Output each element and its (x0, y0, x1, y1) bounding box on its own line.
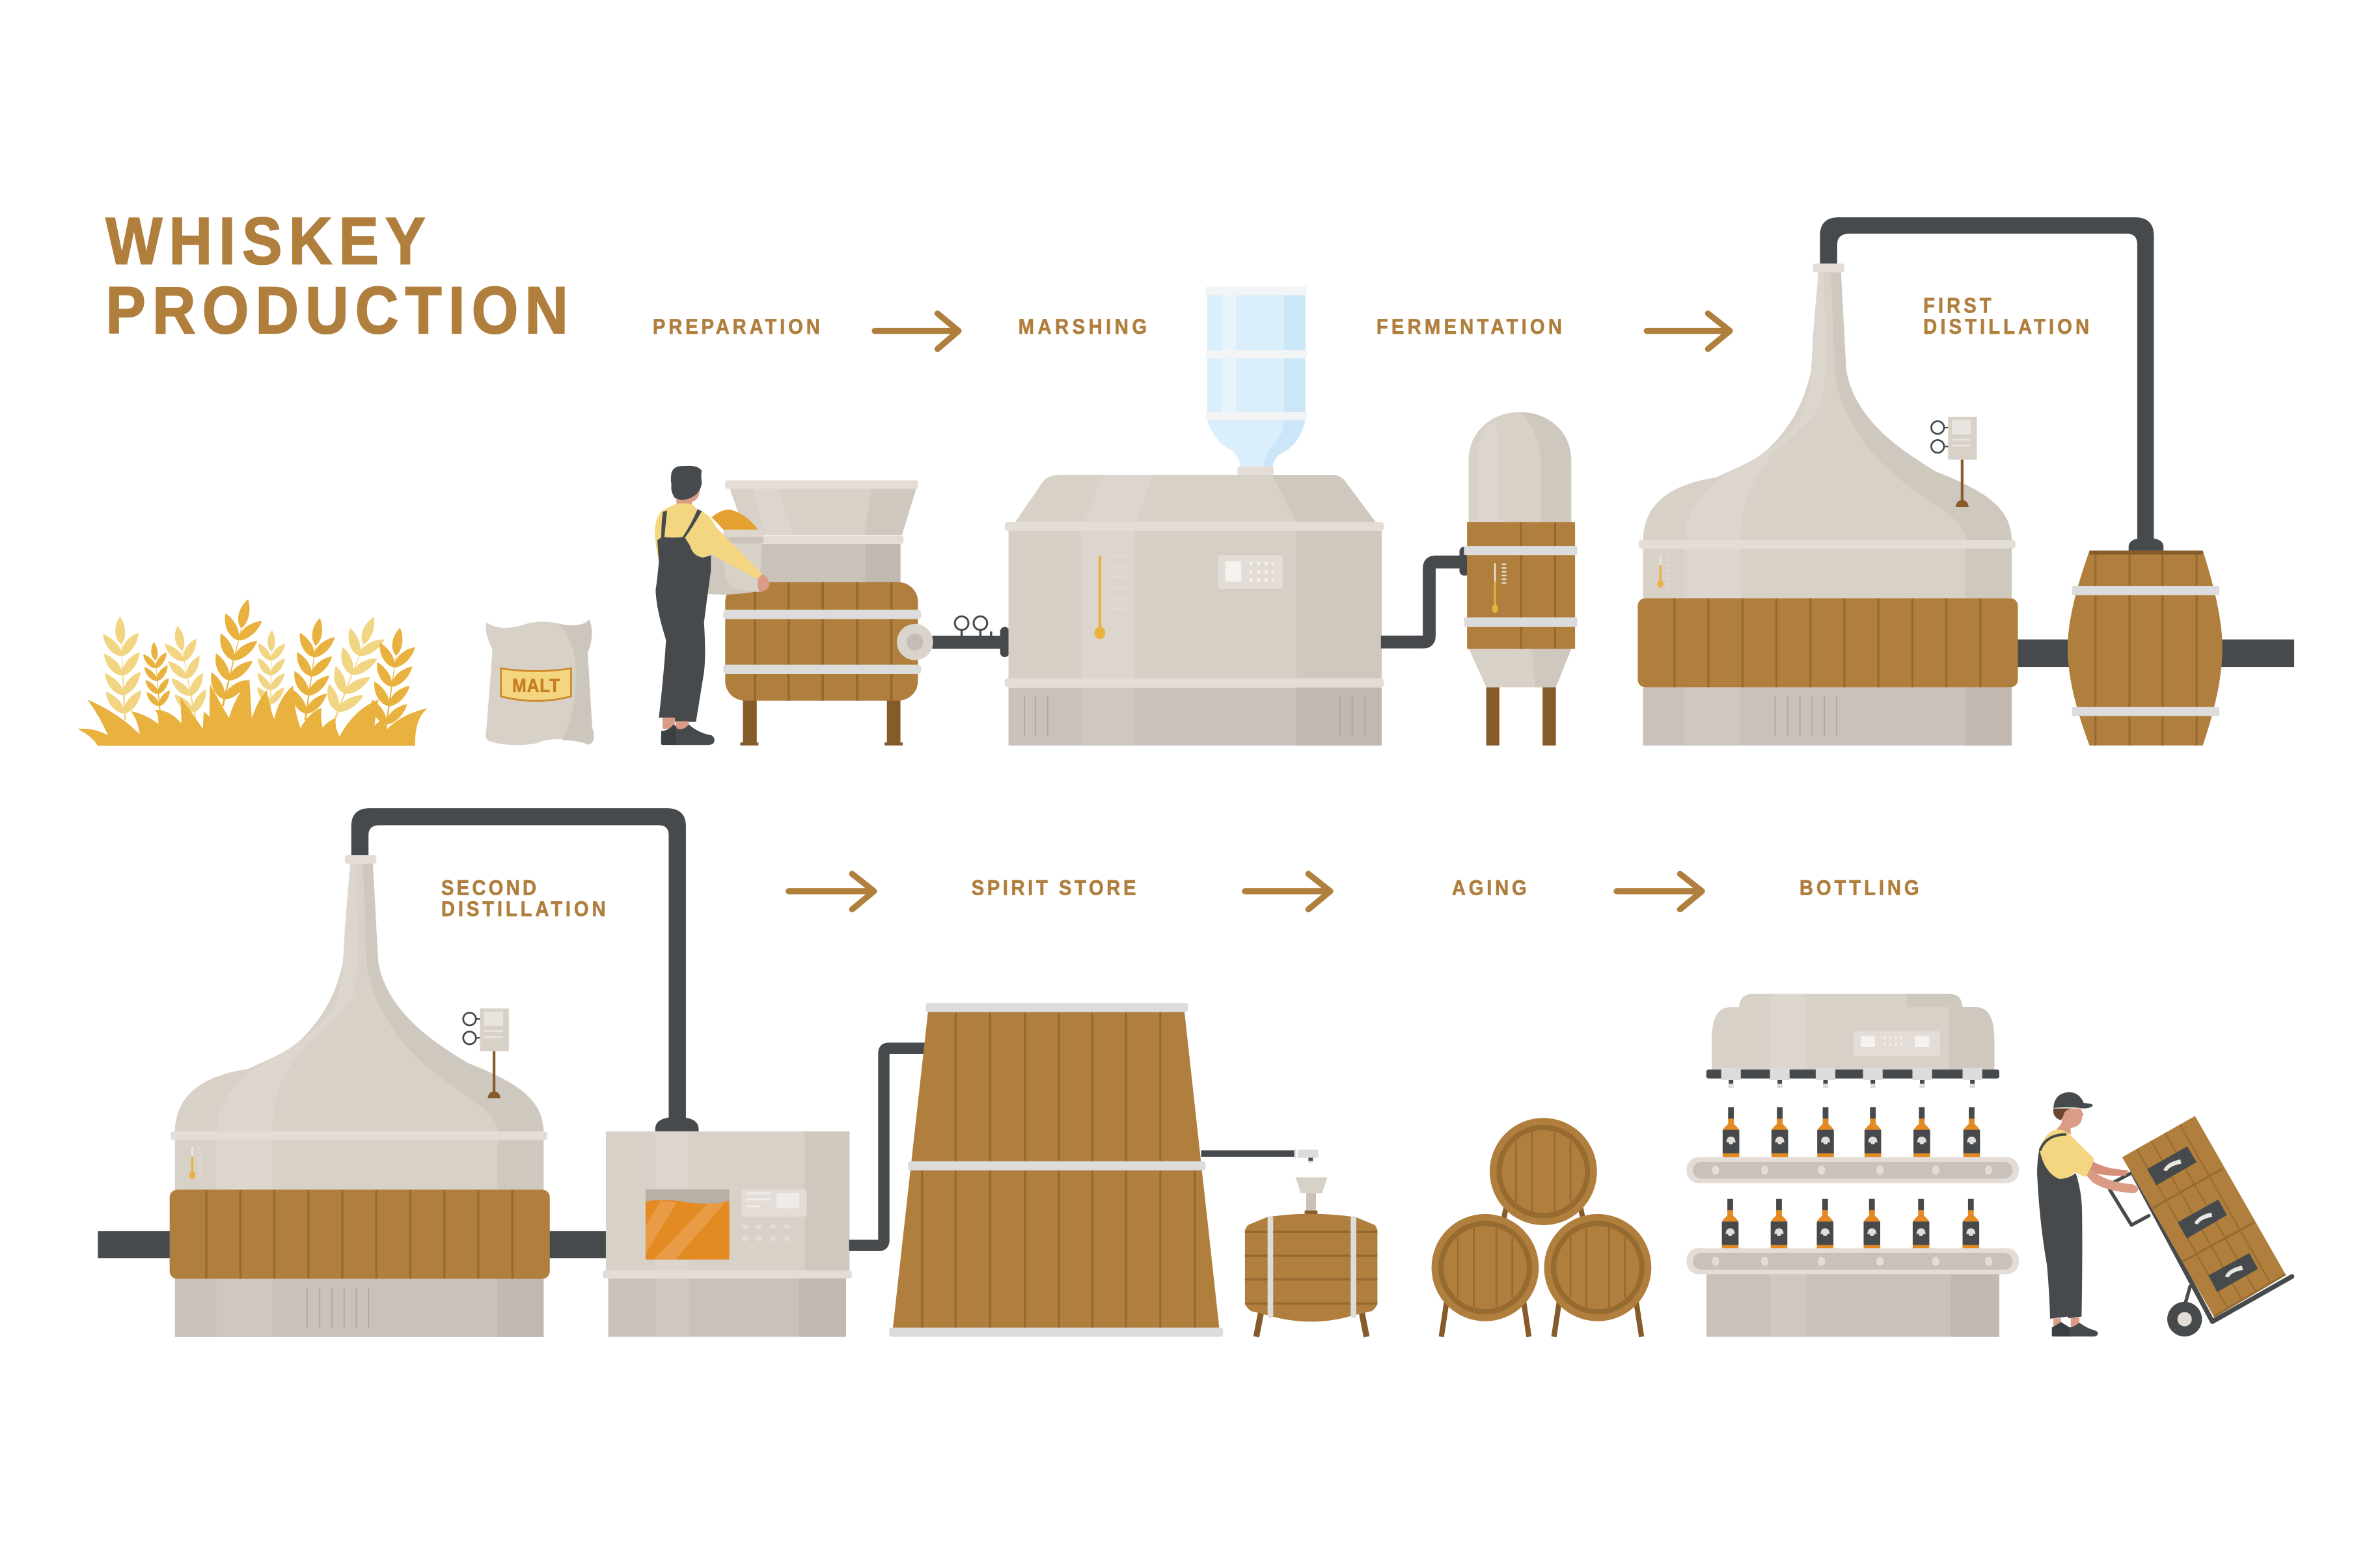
illustration: worker loading malt (655, 466, 769, 745)
arrow: aging to bottling (1617, 874, 1702, 910)
control panel (1853, 1031, 1940, 1056)
illustration: fermentation tank (1459, 412, 1578, 746)
label: bottling: BOTTLING (1800, 876, 1919, 900)
label: preparation: PREPARATION (653, 315, 820, 339)
illustration: conveyor base (1706, 1275, 1999, 1337)
illustration: bottling machine (1706, 994, 1999, 1088)
arrow: fermentation to first distillation (1647, 314, 1730, 349)
hand truck (2110, 1172, 2292, 1336)
control panel (1218, 555, 1283, 589)
label: first distillation (1923, 293, 2089, 339)
illustration: lower conveyor (1686, 1248, 2019, 1275)
arrow: preparation to marshing (875, 314, 959, 349)
illustration: barrel stack (1432, 1118, 1651, 1337)
label: aging: AGING (1452, 876, 1527, 900)
sack label: MALT (512, 675, 560, 696)
illustration: upper conveyor (1686, 1157, 2019, 1183)
label: first distillation: DISTILLATION (1923, 315, 2089, 339)
illustration: bottles upper row (1723, 1107, 1980, 1157)
pipe: second still to boiler (351, 808, 686, 1119)
label: fermentation: FERMENTATION (1376, 315, 1562, 339)
illustration: second still (170, 855, 550, 1337)
label: spirit store: SPIRIT STORE (972, 876, 1136, 900)
pipe: second still feed (98, 1231, 612, 1258)
illustration: milling machine (723, 480, 1009, 746)
label: second distillation (441, 876, 606, 921)
title: WHISKEY (105, 204, 425, 278)
pipe: first still to barrel (1820, 217, 2154, 541)
thermometer (1095, 556, 1125, 639)
label: first distillation: FIRST (1923, 293, 1992, 318)
illustration: small aging cask with funnel (1245, 1178, 1377, 1337)
pipe: mash tun to fermenter (1381, 562, 1473, 642)
label: marshing: MARSHING (1019, 315, 1147, 339)
worker (2037, 1092, 2138, 1336)
sack label (501, 668, 571, 701)
illustration: spirit store vat (889, 1003, 1223, 1337)
arrow: second distillation to spirit store (789, 874, 874, 910)
illustration: boiler unit (603, 1117, 852, 1337)
illustration: water bottle (1205, 286, 1307, 467)
pipe: boiler to spirit store (849, 1048, 925, 1245)
illustration: first still (1637, 264, 2018, 746)
pipe: through barrel (2017, 640, 2294, 667)
label: second distillation: DISTILLATION (441, 897, 606, 921)
control panel (741, 1189, 807, 1239)
title (105, 204, 568, 347)
arrow: spirit store to aging (1245, 874, 1330, 910)
furnace window (646, 1189, 730, 1260)
sack of grain (707, 509, 763, 595)
thermometer (1492, 563, 1504, 613)
illustration: mash tun (1005, 466, 1384, 746)
pipe with gauges (932, 616, 1009, 657)
crates (2122, 1116, 2286, 1317)
title: PRODUCTION (105, 273, 568, 347)
pipe: spirit tap (1201, 1149, 1318, 1163)
illustration: bottles lower row (1722, 1199, 1979, 1249)
illustration: worker with hand truck (2037, 1092, 2292, 1336)
illustration: wheat field (77, 595, 428, 746)
label: second distillation: SECOND (441, 876, 536, 900)
illustration: first distillation barrel (2068, 538, 2223, 746)
illustration: malt sack (486, 619, 594, 745)
